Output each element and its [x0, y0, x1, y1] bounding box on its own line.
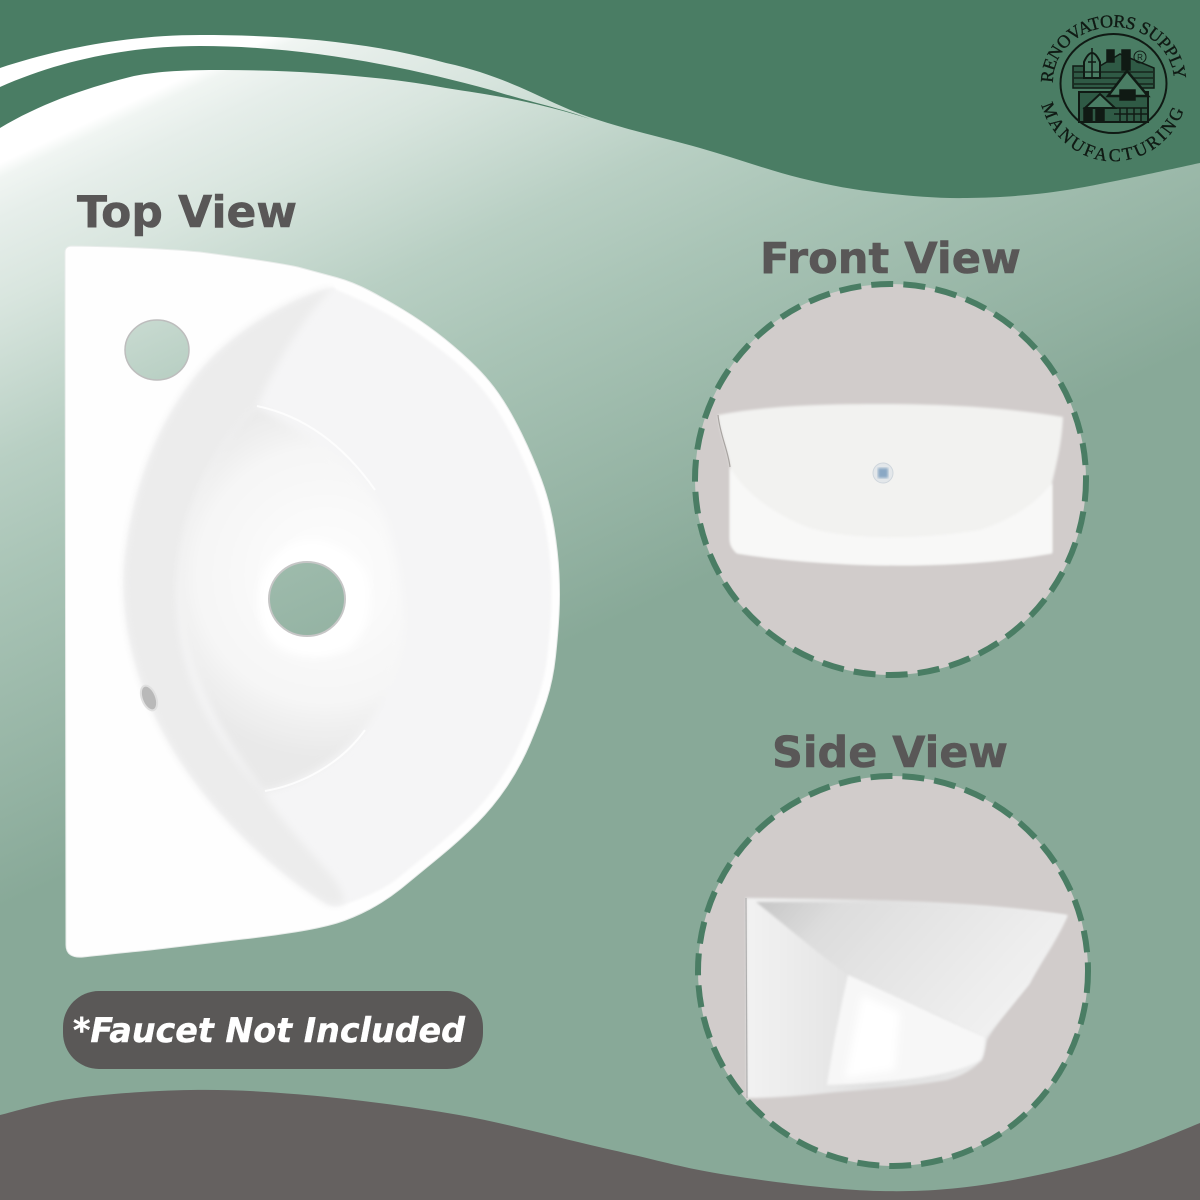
- side sink bright wedge: [827, 975, 985, 1085]
- overflow hole: [138, 683, 160, 713]
- drain hole: [269, 562, 345, 636]
- heading: Top View: Top View: [77, 187, 297, 238]
- side sink left edge: [746, 898, 747, 1098]
- side view sink: [746, 898, 1068, 1098]
- logo arc text bottom: MANUFACTURING: [1041, 101, 1183, 162]
- bottom gray wave: [0, 1090, 1200, 1200]
- front sink left shadow: [718, 415, 730, 467]
- side sink specular highlight: [845, 995, 900, 1078]
- bowl rim shading: [124, 287, 344, 905]
- panel: side view: [698, 776, 1088, 1166]
- logo house: [1073, 48, 1154, 122]
- callout pill: [63, 991, 483, 1069]
- drain surround: [258, 539, 370, 657]
- callout: faucet not included: [63, 991, 483, 1069]
- green gap below white swoosh: [0, 46, 590, 128]
- side view dashed circle: [698, 776, 1088, 1166]
- bowl interior: [124, 287, 552, 906]
- callout text: *Faucet Not Included: [73, 1011, 466, 1051]
- front sink body: [718, 404, 1063, 565]
- heading: Front View: Front View: [760, 234, 1021, 284]
- logo arc text top: RENOVATORS SUPPLY: [1040, 14, 1186, 82]
- basin: [178, 407, 404, 791]
- side sink body: [746, 898, 1068, 1098]
- panel: top view sink: [65, 246, 560, 957]
- logo ring: [1060, 34, 1166, 133]
- sink outline: [65, 246, 560, 957]
- basin lower highlight edge: [265, 730, 365, 791]
- basin highlight edge: [257, 406, 375, 490]
- heading: Side View: Side View: [772, 728, 1008, 778]
- top green wave: [0, 0, 1200, 198]
- faucet hole: [125, 320, 189, 380]
- logo registered mark: [1134, 51, 1146, 63]
- front view sink: [718, 404, 1063, 565]
- side sink upper plane: [756, 902, 1066, 1037]
- panel: front view: [695, 284, 1086, 675]
- front sink lower band: [730, 467, 1052, 565]
- front sink badge center: [878, 468, 888, 478]
- logo: Renovators Supply Manufacturing: [1040, 14, 1186, 162]
- front view dashed circle: [695, 284, 1086, 675]
- front sink badge: [873, 463, 893, 483]
- logo registered mark: R: [1137, 53, 1143, 62]
